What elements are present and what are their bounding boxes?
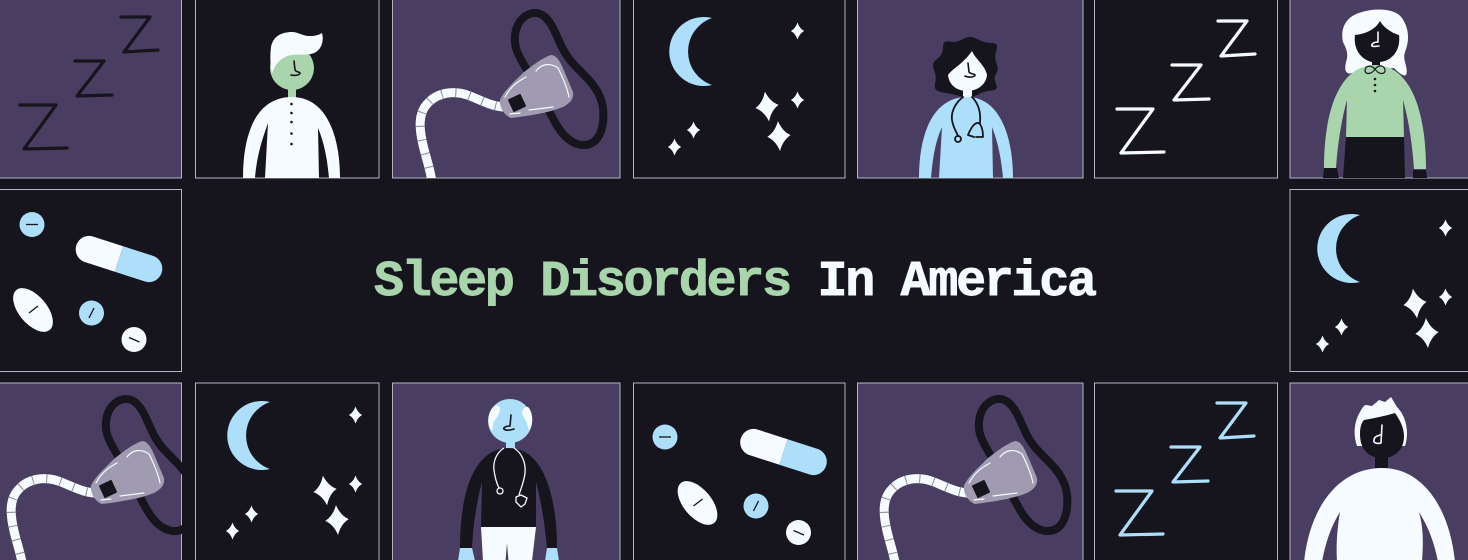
figure: woman bbox=[1323, 10, 1427, 178]
panel: cpap mask bottom bbox=[858, 383, 1083, 560]
figure: man bbox=[1304, 397, 1455, 560]
icon: zzz bbox=[1117, 21, 1255, 153]
icon: round blue pill bbox=[652, 424, 678, 450]
icon: cpap mask bbox=[11, 399, 194, 560]
icon: zzz bbox=[20, 17, 158, 149]
icon: round blue pill bbox=[20, 212, 44, 237]
icon: oval pill bbox=[6, 281, 60, 339]
stethoscope bbox=[952, 97, 983, 142]
icon: moon and stars bbox=[1316, 214, 1452, 352]
icon: small white pill bbox=[122, 327, 146, 352]
icon: moon and stars bbox=[226, 401, 362, 540]
icon: small blue pill bbox=[744, 494, 768, 518]
figure: woman doctor bbox=[919, 37, 1013, 178]
panel: moon and stars bottom bbox=[196, 383, 379, 560]
title: Sleep Disorders In America bbox=[374, 254, 1097, 311]
panel: dark zzz bbox=[0, 0, 182, 178]
icon: cpap mask bbox=[420, 13, 603, 182]
figure: man bbox=[243, 32, 340, 178]
icon: capsule bbox=[76, 236, 162, 282]
icon: capsule bbox=[740, 429, 827, 475]
icon: oval pill bbox=[670, 474, 725, 532]
panel: pills bottom bbox=[634, 383, 845, 560]
panel: man with green face bbox=[196, 0, 379, 178]
figure: doctor bbox=[458, 399, 559, 560]
icon: small white pill bbox=[786, 520, 811, 545]
panel: moon and stars right bbox=[1290, 190, 1468, 372]
panel: pills left bbox=[0, 190, 182, 372]
icon: small blue pill bbox=[79, 300, 104, 326]
icon: moon and stars bbox=[668, 17, 804, 156]
icon: cpap mask bbox=[884, 399, 1067, 560]
icon: zzz bbox=[1116, 403, 1254, 535]
panel: moon and stars top bbox=[634, 0, 845, 178]
panel: cpap mask top bbox=[392, 0, 620, 182]
panel: man with spiky white hair bbox=[1290, 383, 1468, 560]
stethoscope bbox=[494, 448, 527, 507]
panel: doctor with stethoscope bbox=[392, 383, 620, 560]
group: remaining pills bbox=[670, 429, 827, 545]
panel: woman with white hair bbox=[1290, 0, 1468, 178]
panel: cpap mask bottom left bbox=[0, 383, 194, 560]
collar bbox=[1365, 66, 1385, 73]
panel: white zzz bbox=[1094, 0, 1278, 178]
panel: blue zzz bbox=[1094, 383, 1278, 560]
panel: woman doctor bbox=[858, 0, 1083, 178]
